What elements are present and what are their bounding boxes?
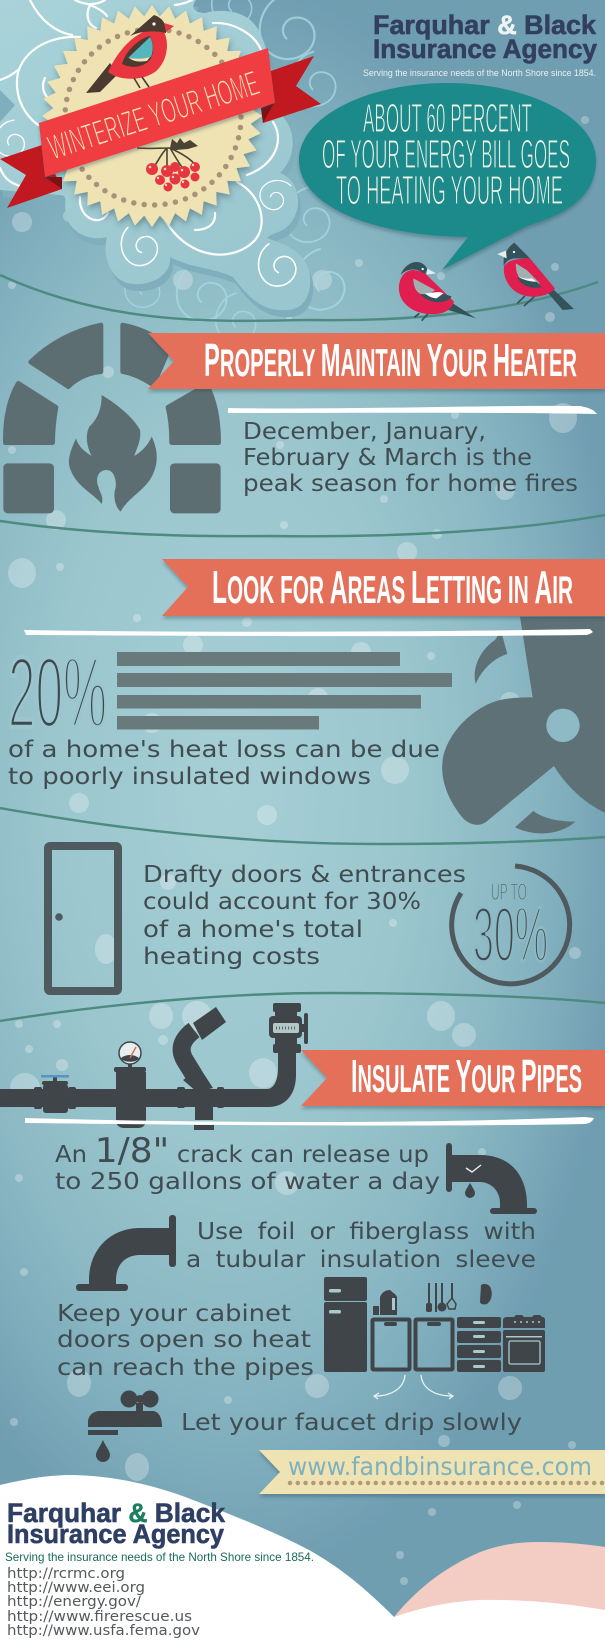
text: crack: An 1/8" crack can release up [55, 1131, 429, 1171]
text: peak season [243, 419, 578, 497]
source links: http://rcrmc.org [7, 1566, 125, 1582]
faint swirls [125, 0, 345, 342]
icon: bird right [497, 243, 574, 310]
text: peak season: February & March is the [243, 445, 532, 471]
source links: http://www.eei.org [7, 1580, 145, 1596]
text: cabinet doors: doors open so heat [57, 1327, 311, 1353]
banner: website: www.fandbinsurance.com [288, 1452, 592, 1481]
icon: gauge [119, 1042, 141, 1064]
icon: door arrows [374, 1375, 453, 1399]
icon: bird left [399, 262, 476, 321]
stat: up to 30 percent [452, 866, 570, 984]
source links: http://www.usfa.fema.gov [7, 1623, 200, 1639]
text: heat loss: to poorly insulated windows [8, 764, 371, 790]
text: peak season: peak season for home fires [243, 471, 578, 497]
icon: elbow pipe [76, 1215, 176, 1291]
text: cabinet doors [57, 1301, 314, 1381]
icon: pipes [0, 1003, 308, 1130]
text: drafty doors: heating costs [143, 944, 320, 970]
text: foil or fiberglass: a tubular insulation sleeve [186, 1247, 536, 1273]
logo: top [363, 10, 597, 79]
text: 20% [8, 637, 107, 749]
text: drafty doors [143, 862, 466, 970]
text: cabinet doors: Keep your cabinet [57, 1301, 291, 1327]
text: faucet drip: Let your faucet drip slowly [181, 1410, 522, 1436]
logo: footer [5, 1498, 314, 1564]
banner: website [259, 1450, 605, 1494]
divider 2 [24, 629, 593, 636]
text: foil or fiberglass [186, 1219, 536, 1273]
logo: footer: Farquhar & Black [7, 1498, 226, 1528]
cloud [0, 0, 313, 317]
white swirls [0, 0, 300, 291]
white hill footer [0, 1475, 605, 1642]
logo: top: Farquhar & Black [373, 10, 597, 40]
source links: http://www.firerescue.us [7, 1609, 192, 1625]
text: drafty doors: could account for 30% [143, 889, 421, 915]
text: heat loss [8, 737, 440, 790]
wires [0, 275, 605, 1021]
icon: door [48, 846, 118, 991]
logo: footer: Serving the insurance needs of the North Shore since 1854. [5, 1550, 314, 1564]
badge: seal [42, 5, 262, 227]
icon: fan [442, 617, 605, 833]
text: drafty doors: of a home's total [143, 917, 363, 943]
text: drafty doors: Drafty doors & entrances [143, 862, 466, 888]
source links [7, 1566, 200, 1639]
stat: up to 30 percent: UP TO [491, 879, 527, 906]
text: foil or fiberglass: Use foil or fiberglass with [197, 1219, 536, 1245]
logo: footer: Insurance Agency [7, 1519, 224, 1549]
divider 3 [25, 1117, 594, 1126]
icon: dripping faucet [88, 1390, 162, 1462]
bars [117, 652, 452, 730]
text: cabinet doors: can reach the pipes [57, 1355, 314, 1381]
icon: bird on badge [86, 15, 174, 93]
text: crack: to 250 gallons of water a day [55, 1169, 440, 1195]
ribbon: Winterize Your Home: WINTERIZE YOUR HOME [44, 64, 264, 168]
ribbon: Winterize Your Home [0, 48, 321, 208]
text: heat loss: of a home's heat loss can be due [8, 737, 440, 763]
icon: berries [137, 138, 200, 192]
icon: heater fire [5, 325, 219, 512]
icon: meter window [273, 1023, 299, 1033]
source links: http://energy.gov/ [7, 1594, 141, 1610]
text: crack [55, 1131, 440, 1195]
logo: top: Insurance Agency [373, 34, 597, 64]
icon: leaking pipe [446, 1143, 537, 1214]
divider 1 [228, 406, 597, 414]
text: peak season: December, January, [243, 419, 486, 445]
icon: kitchen [324, 1277, 545, 1372]
speech bubble [299, 83, 596, 270]
